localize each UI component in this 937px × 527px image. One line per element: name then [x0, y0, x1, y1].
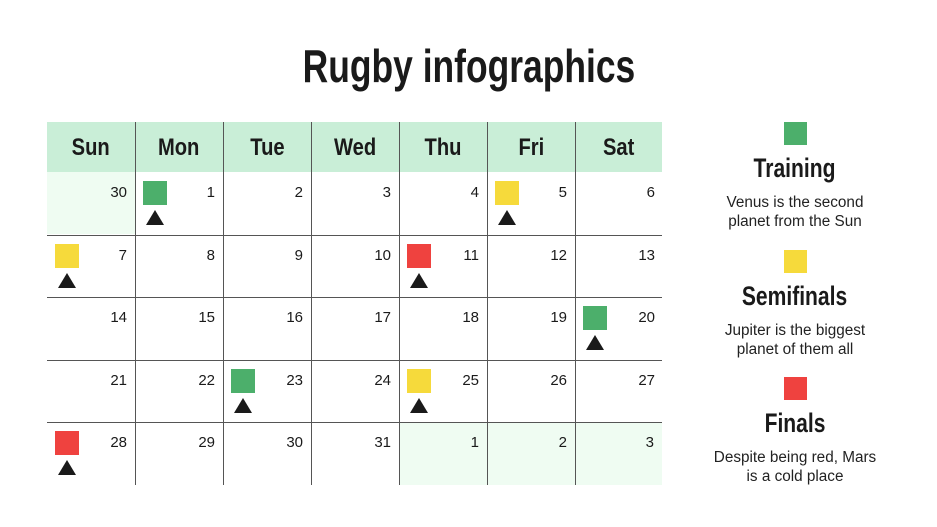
legend: training	[726, 122, 863, 230]
calendar: 26	[550, 372, 567, 389]
calendar: 14	[110, 309, 127, 326]
title: Rugby infographics	[302, 40, 635, 92]
calendar: Thu	[425, 134, 461, 161]
calendar: 30	[110, 184, 127, 201]
calendar: 17	[374, 309, 391, 326]
calendar: Wed	[334, 134, 376, 161]
legend: semifinals: Semifinals	[742, 281, 848, 311]
legend: semifinals	[725, 250, 865, 358]
legend: semifinals: Jupiter is the biggest	[725, 322, 865, 339]
legend: training: planet from the Sun	[728, 213, 862, 230]
calendar: 1	[207, 184, 215, 201]
calendar: 13	[638, 247, 655, 264]
calendar: Tue	[250, 134, 284, 161]
calendar: 3	[646, 434, 654, 451]
calendar: 19	[550, 309, 567, 326]
calendar: 2	[559, 434, 567, 451]
legend: semifinals: planet of them all	[737, 341, 853, 358]
calendar: Sat	[603, 134, 634, 161]
calendar: 8	[207, 247, 215, 264]
calendar: Fri	[518, 134, 544, 161]
legend: finals	[714, 377, 876, 485]
day cells	[47, 172, 662, 485]
calendar: 2	[295, 184, 303, 201]
calendar: 20	[638, 309, 655, 326]
calendar: 10	[374, 247, 391, 264]
legend: training: Training	[754, 153, 836, 183]
calendar: Mon	[158, 134, 200, 161]
calendar: 24	[374, 372, 391, 389]
calendar: 4	[471, 184, 479, 201]
legend: training: Venus is the second	[727, 194, 863, 211]
calendar: 12	[550, 247, 567, 264]
calendar: 18	[462, 309, 479, 326]
legend: finals: Despite being red, Mars	[714, 449, 876, 466]
header row	[47, 122, 662, 172]
calendar: 9	[295, 247, 303, 264]
calendar: 5	[559, 184, 567, 201]
calendar: 6	[647, 184, 655, 201]
calendar: 25	[462, 372, 479, 389]
calendar: 22	[198, 372, 215, 389]
calendar: 31	[374, 434, 391, 451]
legend: finals: Finals	[765, 408, 825, 438]
calendar: 23	[286, 372, 303, 389]
calendar: Sun	[72, 134, 110, 161]
calendar: 7	[119, 247, 127, 264]
calendar: 29	[198, 434, 215, 451]
calendar: 3	[383, 184, 391, 201]
calendar: 16	[286, 309, 303, 326]
calendar: 28	[110, 434, 127, 451]
calendar: 15	[198, 309, 215, 326]
calendar: 27	[638, 372, 655, 389]
calendar: 30	[286, 434, 303, 451]
legend: finals: is a cold place	[747, 468, 843, 485]
calendar: 1	[471, 434, 479, 451]
calendar: 21	[110, 372, 127, 389]
calendar: 11	[463, 247, 479, 264]
